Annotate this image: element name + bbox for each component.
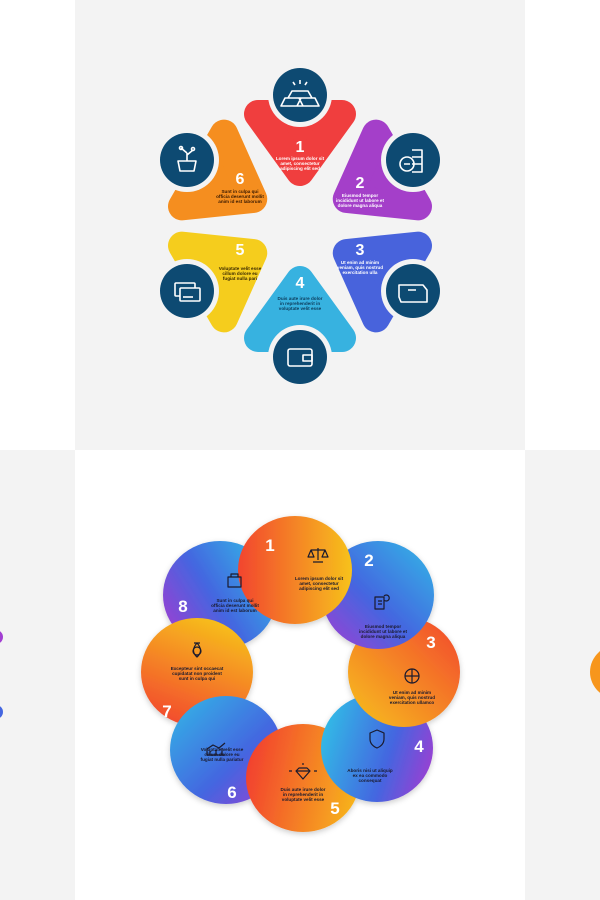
- bottom texts: cillum dolore eu: [204, 752, 240, 757]
- petal 2: [326, 134, 418, 235]
- bottom texts: Ut enim ad minim: [393, 690, 431, 695]
- step 3 label: veniam, quis nostrud: [337, 265, 383, 270]
- petal 1: [258, 114, 342, 172]
- bottom texts: Lorem ipsum dolor sit: [295, 576, 344, 581]
- petal 5: [182, 217, 274, 318]
- bottom texts: Duis aute irure dolor: [281, 787, 326, 792]
- bottom texts: Aboris nisi ut aliquip: [347, 768, 393, 773]
- blob 4: [321, 694, 433, 802]
- top numbers and text: [216, 139, 384, 311]
- top infographic: hexagonal petals: [182, 114, 418, 338]
- step 4 label: in reprehenderit in: [280, 301, 320, 306]
- bottom texts: veniam, quis nostrud: [389, 695, 435, 700]
- step 2 label: Eiusmod tempor: [342, 193, 378, 198]
- step 3 label: 3: [356, 242, 365, 259]
- bottom icons: [193, 548, 419, 779]
- petal 6: [182, 134, 274, 235]
- blob 7: [141, 618, 253, 726]
- step 5 label: fugiat nulla pari: [223, 276, 257, 281]
- bottom numbers: 4: [414, 737, 424, 756]
- bottom numbers: 2: [364, 551, 374, 570]
- step 6 label: 6: [236, 171, 245, 188]
- step 3 label: Ut enim ad minim: [341, 260, 379, 265]
- bottom texts: Eiusmod tempor: [365, 624, 401, 629]
- bottom texts: consequat: [359, 778, 382, 783]
- step 5 label: cillum dolore eu: [222, 271, 258, 276]
- step 1 label: [276, 139, 325, 171]
- bottom texts: exercitation ullamco: [390, 700, 434, 705]
- bottom texts: amet, consectetur: [299, 581, 339, 586]
- top icons: [175, 80, 427, 366]
- bottom texts: Voluptate velit esse: [201, 747, 244, 752]
- step 6 label: anim id est laborum: [218, 199, 262, 204]
- step 6 label: [216, 171, 264, 204]
- step 5 label: 5: [236, 242, 245, 259]
- step 2 label: incididunt ut labore et: [336, 198, 384, 203]
- step 1 label: amet, consectetur: [280, 161, 320, 166]
- step 5 label: [219, 242, 262, 281]
- step 2 label: dolore magna aliqua: [338, 203, 383, 208]
- petal 3: [326, 217, 418, 318]
- step 2 label: 2: [356, 175, 365, 192]
- top icon circles: [155, 63, 445, 389]
- bottom texts: Excepteur sint occaecat: [171, 666, 224, 671]
- step 3 label: [337, 242, 383, 275]
- bottom texts: cupidatat non proident: [172, 671, 222, 676]
- edge fragments: [0, 630, 600, 719]
- petal 4: [258, 280, 342, 338]
- step 6 label: officia deserunt mollit: [216, 194, 264, 199]
- bottom numbers: 8: [178, 597, 188, 616]
- step 4 label: 4: [296, 275, 305, 292]
- step 6 label: Sunt in culpa qui: [221, 189, 259, 194]
- bottom texts: dolore magna aliqua: [361, 634, 406, 639]
- bottom numbers: 5: [330, 799, 340, 818]
- bottom texts: incididunt ut labore et: [359, 629, 407, 634]
- blob 3: [348, 617, 460, 727]
- blob 5: [246, 724, 360, 832]
- step 4 label: voluptate velit esse: [279, 306, 322, 311]
- step 2 label: [336, 175, 384, 208]
- bottom texts: adipiscing elit sed: [299, 586, 339, 591]
- blob 2: [322, 541, 434, 649]
- bottom texts: Sunt in culpa qui: [216, 598, 254, 603]
- step 5 label: Voluptate velit esse: [219, 266, 262, 271]
- bottom texts: voluptate velit esse: [282, 797, 325, 802]
- bottom numbers: [162, 536, 436, 818]
- blob 8: [163, 541, 277, 649]
- step 1 label: Lorem ipsum dolor sit: [276, 156, 325, 161]
- bottom texts: sunt in culpa qui: [179, 676, 215, 681]
- bottom texts: ex ea commodo: [353, 773, 388, 778]
- step 1 label: 1: [296, 139, 305, 156]
- step 1 label: adipiscing elit sed: [280, 166, 320, 171]
- bottom numbers: 7: [162, 702, 172, 721]
- step 3 label: exercitation ulla: [343, 270, 378, 275]
- bottom infographic: ring of 8 blobs: [141, 516, 460, 832]
- bottom numbers: 1: [265, 536, 275, 555]
- blob 6: [170, 696, 282, 804]
- bottom texts: officia deserunt mollit: [211, 603, 259, 608]
- step 4 label: [278, 275, 323, 311]
- bottom texts: anim id est laborum: [213, 608, 257, 613]
- bottom texts: fugiat nulla pariatur: [201, 757, 244, 762]
- step 4 label: Duis aute irure dolor: [278, 296, 323, 301]
- blob 1: [238, 516, 352, 624]
- bottom texts: [171, 576, 435, 802]
- bottom numbers: 6: [227, 783, 237, 802]
- bottom texts: in reprehenderit in: [283, 792, 323, 797]
- bottom numbers: 3: [426, 633, 436, 652]
